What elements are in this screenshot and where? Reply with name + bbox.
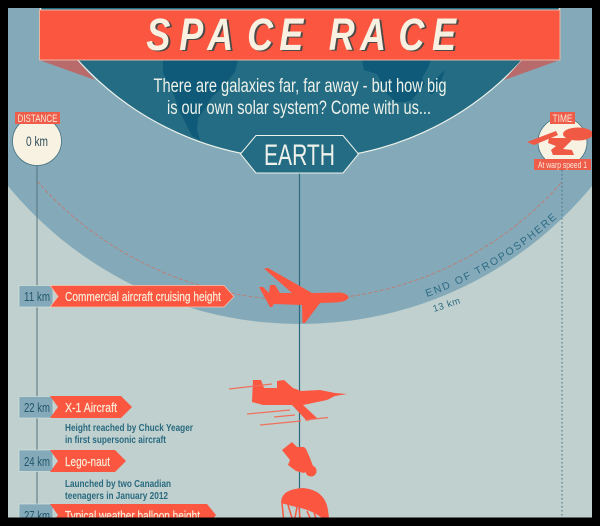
timeline: time axis [562,170,563,516]
note: Height reached by Chuck Yeager [65,422,193,434]
intro text: There are galaxies far, far away - but how big [154,76,446,97]
icon: x-1 aircraft [229,380,347,425]
timeline: centre axis [298,170,300,518]
banner fold right [504,60,560,80]
row: 24 km: Lego-naut [65,454,110,469]
continent: madagascar [428,70,445,95]
row: 22 km: 22 km [24,400,50,415]
row: 22 km [19,396,193,446]
title shadow: SPACERACE [148,10,460,61]
intro text: is our own solar system? Come with us... [167,98,431,119]
row: 27 km: Typical weather balloon height [65,508,200,523]
continent: africa [362,60,431,102]
row: 24 km: 24 km [24,454,50,469]
time badge: TIME [552,113,572,125]
timeline: distance axis [36,166,38,504]
row: 11 km: 11 km [24,289,50,304]
icon: lego figure [282,442,316,476]
row: 11 km [19,286,234,307]
row: 27 km: 27 km [24,508,50,523]
icon: parachute balloon [281,488,329,518]
time badge [527,112,593,171]
note: in first supersonic aircraft [65,434,166,446]
icon: commercial airplane [259,268,349,323]
distance badge [12,112,62,166]
end of troposphere label: END OF TROPOSPHERE [425,213,556,297]
row: 27 km [18,504,216,518]
banner fold left [39,60,95,80]
intro text [154,76,446,119]
title banner [40,9,560,61]
row: 22 km: X-1 Aircraft [65,400,117,415]
note: teenagers in January 2012 [65,490,168,502]
atmosphere circle [0,0,600,324]
earth hexagon label [240,136,358,173]
13 km label: 13 km [432,296,462,315]
row: 24 km [19,450,171,502]
row: 11 km: Commercial aircraft cruising height [65,289,221,304]
note [66,424,193,445]
earth globe [40,8,560,154]
continent: south america [163,60,238,140]
dashed troposphere line [37,181,562,300]
title: SPACERACE [146,9,458,60]
icon: starship [527,128,593,155]
note: Launched by two Canadian [65,478,171,490]
note [65,480,170,501]
distance badge: DISTANCE [18,113,58,125]
earth hexagon label: EARTH [264,139,335,172]
distance badge: 0 km [26,133,48,149]
